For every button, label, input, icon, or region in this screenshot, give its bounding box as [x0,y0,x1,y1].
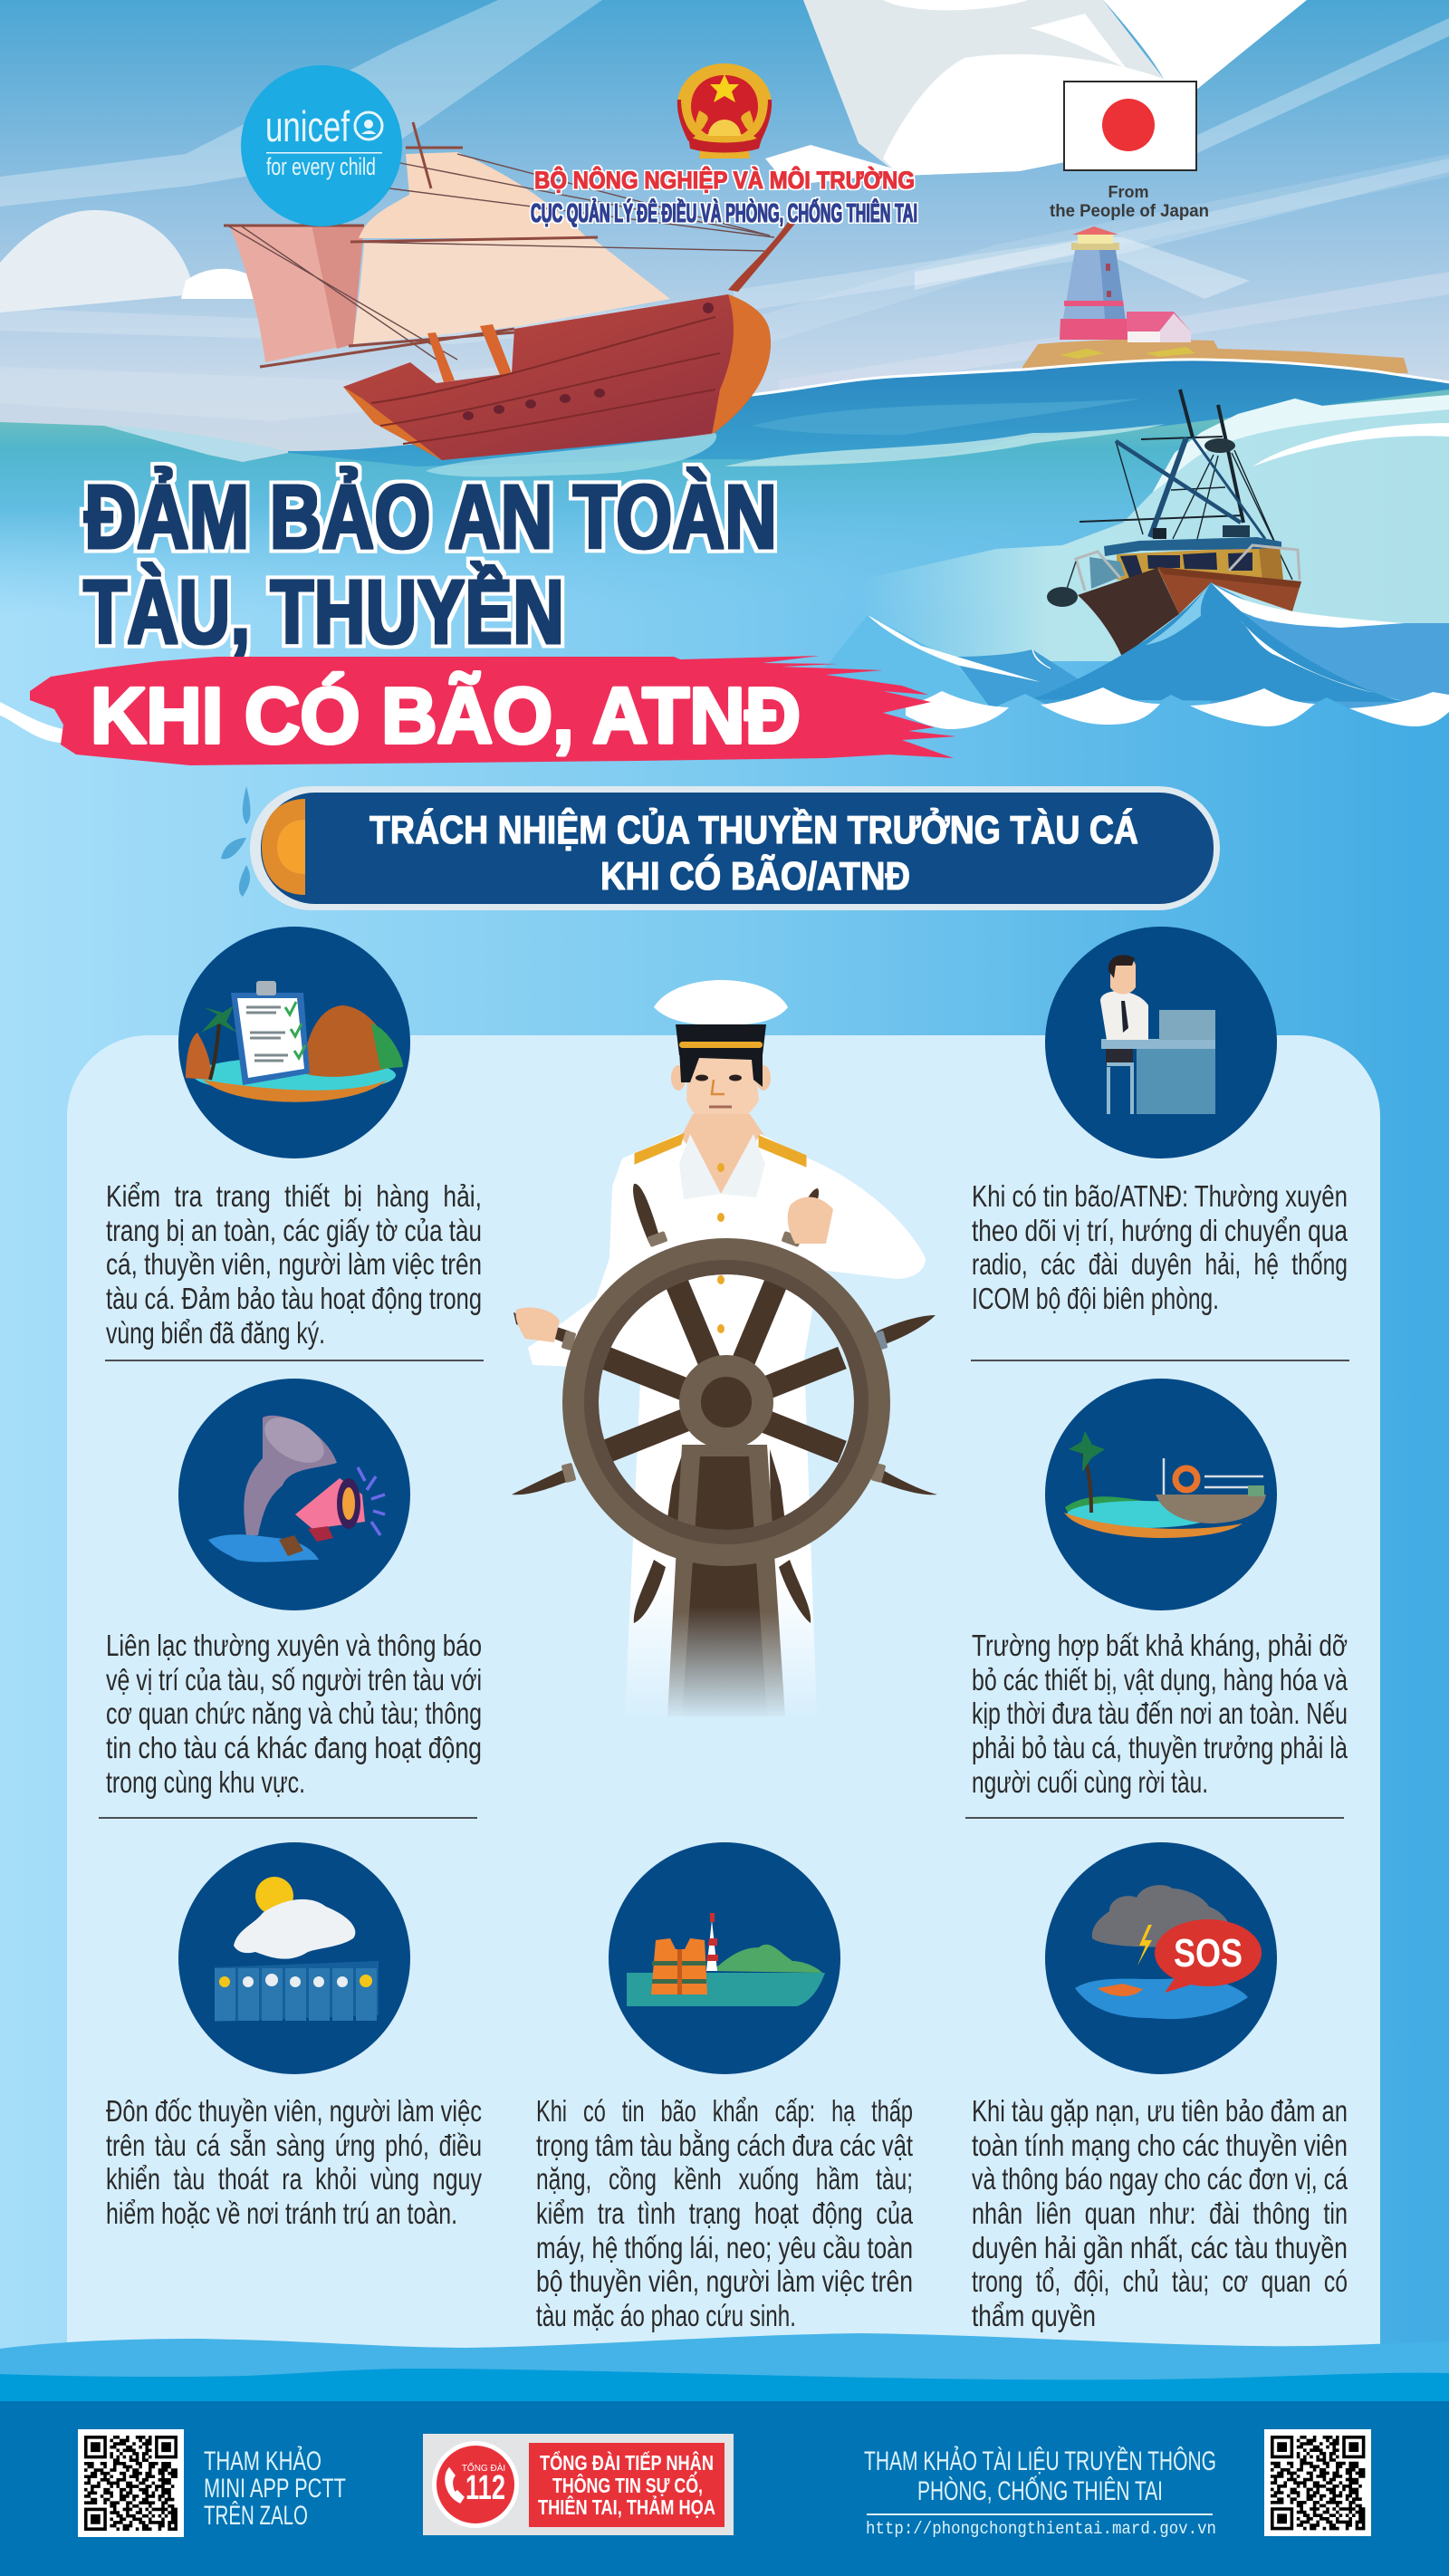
footer [0,2401,1449,2576]
sea: teal foreground swell [0,389,1449,815]
footer text: mini app: THAM KHẢO [204,2446,321,2476]
text: monitor radio: ICOM bộ đội biên phòng. [972,1282,1219,1315]
text: in distress: nhân liên quan như: đài thông tin [972,2196,1348,2230]
text: communicate: tin cho tàu cá khác đang hoạt động [106,1731,482,1764]
text: check equipment: vùng biển đã đăng ký. [106,1316,325,1350]
text: urgent storm: bộ thuyền viên, người làm việc trên [536,2264,913,2298]
logo: unicef: for every child [266,153,376,180]
rigging [229,154,774,360]
title: two lines: ĐẢM BẢO AN TOÀN [84,466,777,568]
fishing boat [1047,389,1301,657]
text: urgent storm: nặng, cồng kềnh xuống hầm tàu; [536,2162,913,2196]
cabin [1153,528,1166,539]
text: urgent storm: tàu mặc áo phao cứu sinh. [536,2299,796,2332]
text: check equipment: trang bị an toàn, các giấy tờ của tàu [106,1214,482,1247]
text: abandon ship: Trường hợp bất khả kháng, phải dỡ [972,1629,1348,1662]
portholes [463,303,714,420]
hotline 112 box: 112 [465,2469,505,2507]
text: in distress: thẩm quyền [972,2299,1096,2332]
icon: radio operator [1045,927,1277,1158]
hull [343,294,771,460]
logo: Japan flag [1050,82,1209,221]
text: urgent storm: trọng tâm tàu bằng cách đưa các vật [536,2129,913,2162]
icon: life vest and lighthouse [609,1842,840,2074]
anchor ball [1047,587,1078,607]
title: two lines [83,466,777,663]
rigging and masts [1080,389,1292,580]
wheel handles [512,1184,937,1623]
small waves on the left [797,615,993,702]
text: check equipment [106,1179,482,1350]
text: check equipment: cá, thuyền viên, người làm việc trên [106,1247,482,1281]
text: prepare crew: hiểm hoặc về nơi tránh trú an toàn. [106,2196,457,2230]
hotline 112 box: THIÊN TAI, THẢM HỌA [538,2494,715,2519]
hull [1078,568,1179,657]
right back wave [1211,582,1449,716]
text: communicate: Liên lạc thường xuyên và thông báo [106,1629,482,1662]
content panel [67,1035,1380,2355]
text: check equipment: Kiểm tra trang thiết bị hàng hải, [106,1179,482,1213]
ministry name: BỘ NÔNG NGHIỆP VÀ MÔI TRƯỜNG [534,166,915,194]
sails [229,225,364,362]
text: monitor radio [972,1179,1348,1315]
QR code: documents [1264,2429,1371,2536]
ministry name [531,166,917,228]
big sailing ship [224,122,795,476]
text: in distress: toàn tính mạng cho các thuyền viên [972,2129,1348,2162]
head [671,1049,771,1194]
text: abandon ship: người cuối cùng rời tàu. [972,1765,1208,1799]
text: in distress [972,2094,1348,2332]
logo: unicef: unicef [265,102,350,150]
text: communicate: vệ vị trí của tàu, số người trên tàu với [106,1663,482,1697]
text: check equipment: tàu cá. Đảm bảo tàu hoạt động trong [106,1282,482,1315]
footer text: mini app: TRÊN ZALO [204,2501,308,2531]
logo: national emblem [677,63,772,159]
masts and yards [224,122,598,367]
foreground waves [0,582,1449,779]
hotline 112 box: THÔNG TIN SỰ CỐ, [552,2473,703,2497]
hotline 112 box: TỔNG ĐÀI TIẾP NHẬN [540,2450,714,2475]
text: communicate: cơ quan chức năng và chủ tàu; thông [106,1697,482,1730]
text: abandon ship [972,1629,1348,1799]
uniform [528,1134,926,1716]
text: urgent storm: Khi có tin bão khẩn cấp: hạ thấp [536,2094,913,2128]
pedestal [664,1449,788,1544]
pale wave crest behind the fishing boat [860,395,1449,661]
house [1127,312,1191,332]
text: monitor radio: Khi có tin bão/ATNĐ: Thường xuyên [972,1179,1348,1213]
logo: Japan flag: From [1108,183,1148,201]
text: communicate: trong cùng khu vực. [106,1765,305,1799]
wheel [581,1256,872,1548]
text: in distress: Khi tàu gặp nạn, ưu tiên bảo đảm an [972,2094,1348,2128]
sky [0,0,1449,471]
icon: SOS [1045,1842,1277,2074]
splash [221,786,250,897]
hotline 112 box [423,2434,734,2535]
icon: checklist and island [178,927,410,1158]
icon: tornado and megaphone [178,1379,410,1610]
sea: distant water [288,360,1449,480]
footer text: reference materials [864,2446,1216,2539]
section heading pill: KHI CÓ BÃO/ATNĐ [600,853,910,899]
QR code: mini app [78,2429,184,2537]
footer text: reference materials: PHÒNG, CHỐNG THIÊN TAI [917,2475,1163,2506]
logo: Japan flag: the People of Japan [1050,202,1209,221]
island [1022,339,1408,373]
light beam [915,237,1250,299]
rails and block [1089,557,1125,589]
title: red brush banner [30,656,956,765]
text: prepare crew: khiển tàu thoát ra khỏi vùng nguy [106,2162,482,2196]
text: in distress: duyên hải gần nhất, các tàu thuyền [972,2231,1348,2264]
ministry name: CỤC QUẢN LÝ ĐÊ ĐIỀU VÀ PHÒNG, CHỐNG THIÊN TAI [531,197,917,228]
lighthouse island [1022,226,1408,373]
text: prepare crew [106,2094,482,2230]
text: communicate [106,1629,482,1799]
title: two lines: TÀU, THUYỀN [83,562,564,663]
foam [426,433,716,476]
icon: weather forecast [178,1842,410,2074]
hotline 112 box: TỔNG ĐÀI [462,2462,505,2474]
section heading pill: TRÁCH NHIỆM CỦA THUYỀN TRƯỞNG TÀU CÁ [369,806,1138,852]
captain illustration [512,980,937,1716]
section heading pill [221,786,1220,910]
foreground water with small peaks [797,694,1449,779]
cloud: left [0,210,258,312]
main wave [1032,582,1401,702]
text: prepare crew: trên tàu cá sẵn sàng ứng phó, điều [106,2129,482,2162]
text: urgent storm: máy, hệ thống lái, neo; yêu cầu toàn [536,2231,913,2264]
lighthouse tower [1060,250,1128,340]
text: prepare crew: Đôn đốc thuyền viên, người làm việc [106,2094,482,2128]
icon: boat at island [1045,1379,1277,1610]
white crescents [906,691,1009,729]
footer text: reference materials: http://phongchongthientai.mard.gov.vn [866,2519,1216,2539]
text: abandon ship: phải bỏ tàu cá, thuyền trưởng phải là [972,1731,1348,1764]
cloud: top right white shapes [765,0,1307,186]
title: red brush banner: KHI CÓ BÃO, ATNĐ [91,672,801,760]
icon: SOS: SOS [1174,1931,1243,1975]
footer text: mini app [204,2446,346,2531]
footer text: reference materials: THAM KHẢO TÀI LIỆU TRUYỀN THÔNG [864,2446,1216,2476]
bottom waves [0,2333,1449,2409]
text: monitor radio: theo dõi vị trí, hướng di chuyển qua [972,1214,1348,1247]
text: urgent storm [536,2094,913,2332]
hands [788,1197,833,1244]
text: urgent storm: kiểm tra tình trạng hoạt động của [536,2196,913,2230]
logo: unicef [241,65,402,226]
hat [654,980,788,1055]
footer text: mini app: MINI APP PCTT [204,2474,346,2504]
